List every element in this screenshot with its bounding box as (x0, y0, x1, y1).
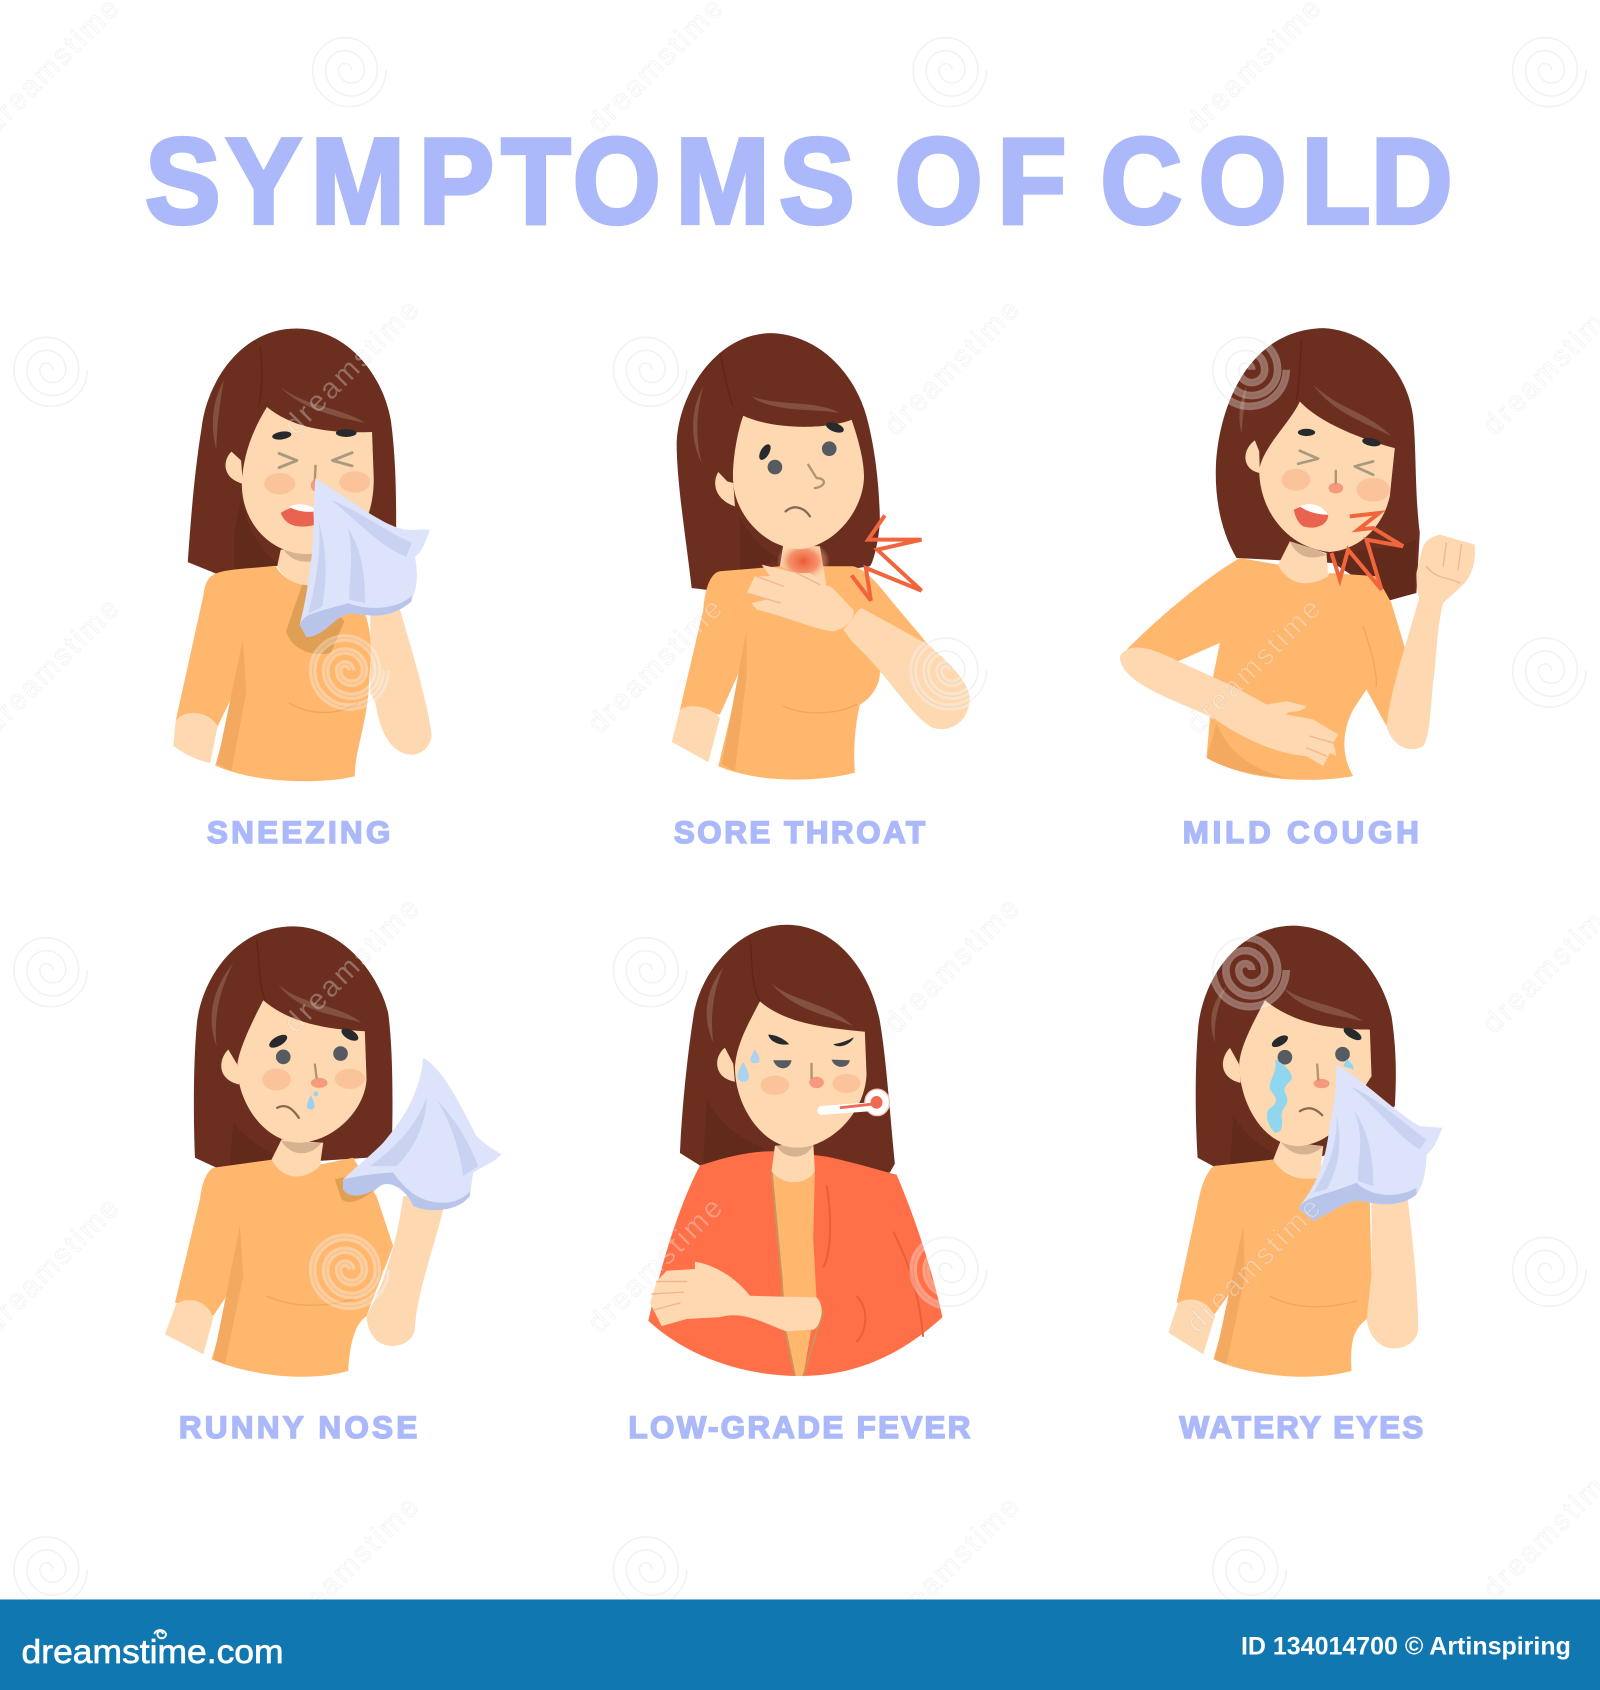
face (733, 416, 864, 549)
far arm (370, 596, 432, 755)
watermark text: dreamstime (582, 591, 731, 740)
sore throat glow (777, 541, 830, 582)
handkerchief (335, 1058, 501, 1210)
raised arm (1367, 1189, 1418, 1349)
hair (1216, 328, 1420, 600)
mouth (281, 504, 318, 527)
face (237, 1000, 367, 1143)
brows (768, 1035, 854, 1046)
face (1239, 1000, 1372, 1146)
neck (772, 1142, 815, 1182)
figure: sneezing (173, 328, 432, 781)
face (242, 407, 374, 554)
footer bar (0, 1599, 1600, 1690)
shirt (176, 566, 371, 781)
near arm cuff (1168, 1299, 1215, 1354)
hair (680, 925, 895, 1173)
shirt (1127, 558, 1405, 780)
brows and eyes (267, 1026, 360, 1064)
hair (1196, 926, 1396, 1166)
nose (809, 1064, 824, 1088)
ear (1245, 440, 1260, 473)
image id: ID 134014700 © Artinspiring (1241, 1633, 1571, 1660)
snot drops (307, 1092, 318, 1109)
hair (677, 333, 880, 590)
mouth (1294, 504, 1328, 528)
brows and eyes (1270, 1025, 1363, 1065)
near arm cuff (672, 706, 720, 762)
watermark text: dreamstime (278, 292, 427, 441)
robe edge (772, 1171, 823, 1376)
sweat drops (738, 1050, 760, 1082)
ear (717, 1048, 735, 1082)
handkerchief (300, 478, 430, 637)
label: sneezing: SNEEZING (207, 815, 390, 850)
ear (1223, 1048, 1241, 1083)
footer logo: dreamstime.com (22, 1634, 284, 1671)
neck (1278, 541, 1328, 583)
ear (221, 1050, 239, 1085)
blush (761, 1074, 861, 1095)
mouth (786, 507, 810, 516)
brows and eyes (757, 420, 845, 474)
watermark text: dreamstime (1180, 1190, 1329, 1339)
watermark text: dreamstime (278, 891, 427, 1040)
crossed arm (650, 1262, 822, 1331)
label: mild cough: MILD COUGH (1183, 815, 1419, 850)
figure: low-grade fever (648, 925, 942, 1376)
neck (272, 1139, 323, 1176)
raised arm (367, 1196, 446, 1346)
label: runny nose: RUNNY NOSE (179, 1410, 417, 1445)
blush (1282, 469, 1390, 502)
nose (1314, 1065, 1330, 1088)
shirt (175, 1158, 393, 1377)
watermark text: dreamstime (278, 1489, 427, 1638)
figure: watery eyes (1168, 926, 1442, 1377)
mouth (277, 1106, 299, 1118)
raised arm (843, 608, 970, 729)
robe (648, 1151, 942, 1376)
nose (311, 466, 320, 491)
tears (1267, 1060, 1354, 1133)
hair (194, 926, 393, 1168)
handkerchief (1298, 1065, 1442, 1221)
watermark text: dreamstime (878, 1489, 1027, 1638)
neck (1273, 1141, 1323, 1179)
raised arm and fist (1386, 535, 1475, 749)
robe folds (823, 1185, 923, 1342)
label: sore throat: SORE THROAT (674, 815, 925, 850)
watermark text: dreamstime (582, 1190, 731, 1339)
hand on neck (747, 565, 854, 631)
ear (715, 472, 735, 506)
inner shirt (772, 1171, 817, 1376)
brows and eyes (272, 429, 357, 468)
watermark text: dreamstime (1180, 591, 1329, 740)
face (735, 1001, 867, 1148)
near arm cuff (165, 1300, 213, 1354)
shirt (680, 566, 928, 780)
near arm cuff (173, 713, 218, 763)
nose (808, 465, 824, 488)
pain star (1331, 513, 1403, 590)
hair (188, 328, 396, 574)
pain star (852, 515, 922, 601)
face (1259, 401, 1395, 552)
brows and eyes (1298, 429, 1381, 475)
ear (226, 452, 243, 484)
mouth (1300, 1108, 1322, 1115)
thermometer (817, 1089, 890, 1116)
shirt (1177, 1159, 1372, 1377)
arm across belly (1120, 647, 1338, 766)
nose (311, 1065, 328, 1088)
label: watery eyes: WATERY EYES (1180, 1410, 1423, 1445)
figure: sore throat (672, 333, 970, 780)
watermark text: dreamstime (878, 292, 1027, 441)
blush (264, 471, 370, 494)
title: SYMPTOMS OF COLD (145, 113, 1452, 249)
watermark text: dreamstime (878, 891, 1027, 1040)
neck (277, 550, 317, 585)
nose (1328, 471, 1343, 493)
figure: runny nose (165, 926, 501, 1377)
neck (780, 545, 827, 586)
sleepy eyes (773, 1060, 850, 1068)
figure: mild cough (1120, 328, 1475, 780)
blush (262, 1069, 365, 1091)
logo spiral (154, 1630, 166, 1638)
label: low-grade fever: LOW-GRADE FEVER (629, 1410, 970, 1445)
